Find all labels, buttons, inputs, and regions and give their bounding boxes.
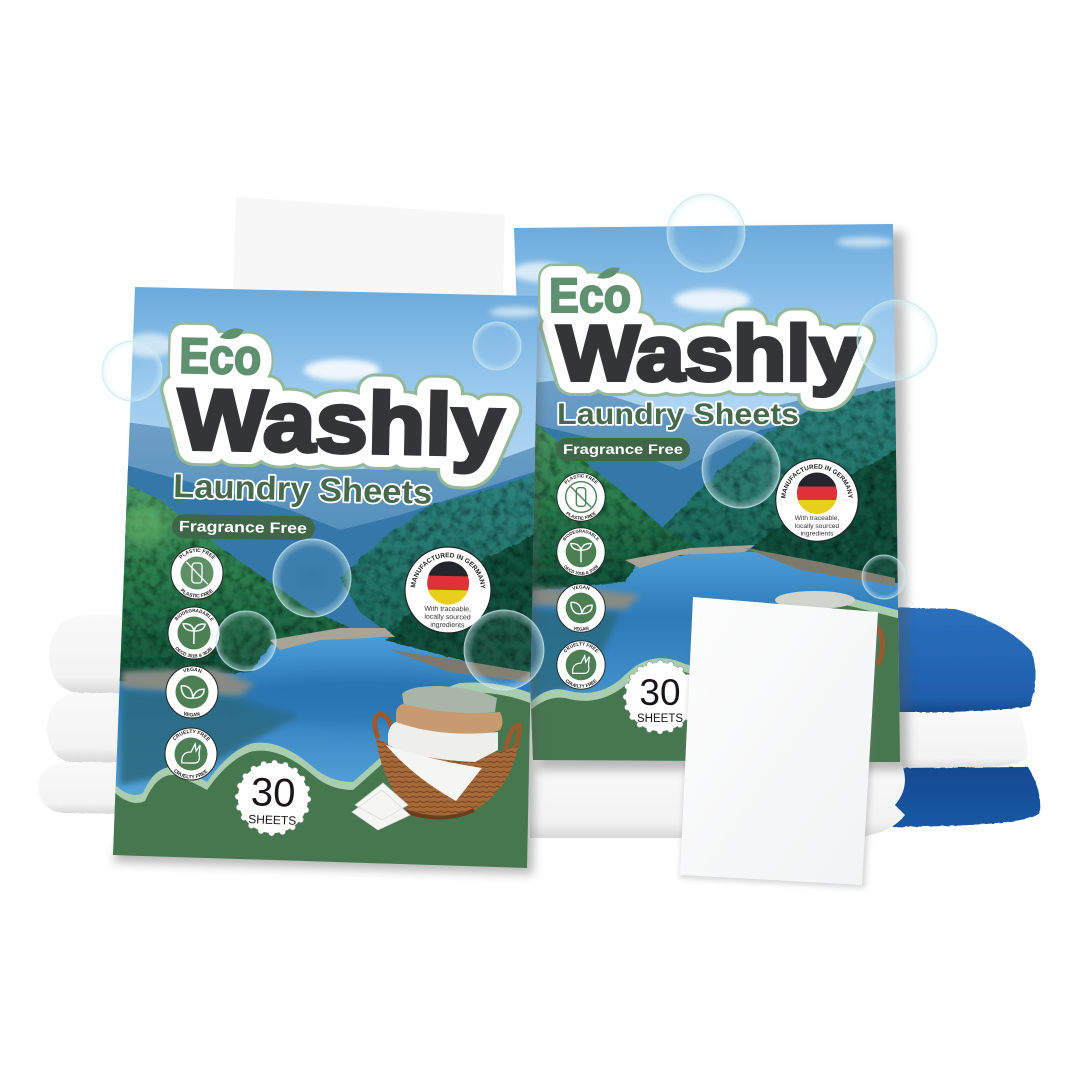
left pack badge: manufactured in Germany: locally sourced bbox=[424, 614, 471, 621]
left pack badge: manufactured in Germany: MANUFACTURED IN GERMANY bbox=[410, 552, 486, 588]
left pack badge: manufactured in Germany: ingredients bbox=[430, 622, 465, 629]
soap bubbles bbox=[102, 194, 937, 690]
left pack 30 sheets seal: SHEETS bbox=[248, 812, 296, 828]
right pack badge: plastic free: PLASTIC FREE bbox=[564, 474, 598, 484]
right towel stack bbox=[885, 607, 1040, 827]
back laundry sheet bbox=[233, 197, 505, 300]
right pack badge: vegan: VEGAN bbox=[574, 626, 589, 631]
left pack logo: Washly bbox=[177, 372, 505, 474]
left pack badge: vegan: VEGAN bbox=[184, 712, 200, 716]
right pack badge: biodegradable: OECD 301B & 302B bbox=[564, 565, 598, 575]
left pack logo: Washly bbox=[177, 372, 505, 474]
left pack badge: vegan bbox=[166, 666, 218, 718]
white towel under right pack bbox=[530, 760, 905, 838]
left pack badge: manufactured in Germany: With traceable, bbox=[424, 606, 471, 613]
front sheet shadow bbox=[680, 600, 880, 888]
right pack 30 sheets seal: SHEETS bbox=[637, 713, 683, 725]
right pack badge: biodegradable bbox=[556, 527, 606, 577]
right pack towels peeking bbox=[775, 591, 855, 609]
right pack badge: plastic free: PLASTIC FREE bbox=[566, 512, 596, 520]
left pack artwork bbox=[110, 285, 545, 870]
right pack badge: manufactured in Germany: locally sourced bbox=[795, 523, 839, 530]
left pack fragrance pill: Fragrance Free bbox=[179, 518, 307, 537]
left pack badge: plastic free bbox=[170, 546, 224, 600]
left pack logo: Eco bbox=[179, 328, 262, 385]
right pack artwork bbox=[505, 220, 910, 772]
right pack badge: cruelty free: CRUELTY FREE bbox=[564, 642, 598, 653]
product pack: right bbox=[514, 224, 900, 762]
left pack basket with towels bbox=[352, 686, 519, 830]
right pack 30 sheets seal: 30 bbox=[639, 672, 681, 713]
product pack: left bbox=[113, 287, 538, 868]
right pack logo: Eco bbox=[549, 270, 631, 323]
left pack logo bbox=[177, 327, 506, 474]
right pack badge: vegan: VEGAN bbox=[572, 585, 590, 590]
right pack badge: manufactured in Germany: With traceable, bbox=[795, 515, 840, 522]
left pack product name: Laundry Sheets bbox=[173, 467, 433, 511]
right pack logo: Washly bbox=[557, 309, 859, 397]
left pack badge: biodegradable bbox=[168, 606, 220, 660]
left pack badge: cruelty free: CRUELTY FREE bbox=[174, 769, 208, 778]
right pack product name: Laundry Sheets bbox=[557, 398, 799, 431]
left pack badge: cruelty free bbox=[164, 728, 218, 780]
right pack badge: manufactured in Germany: ingredients bbox=[801, 531, 834, 538]
right pack 30 sheets seal bbox=[626, 663, 694, 731]
right pack fragrance pill bbox=[556, 438, 690, 461]
right pack badge: manufactured in Germany: MANUFACTURED IN GERMANY bbox=[781, 464, 853, 498]
right pack badge: vegan bbox=[556, 583, 606, 633]
left pack badge: plastic free: PLASTIC FREE bbox=[179, 548, 216, 560]
left pack 30 sheets seal: 30 bbox=[250, 770, 296, 816]
left pack badge: biodegradable: BIODEGRADABLE bbox=[174, 608, 214, 622]
right pack logo: Eco bbox=[549, 270, 631, 323]
right pack shadow bbox=[535, 232, 908, 770]
right pack badge: plastic free bbox=[556, 472, 606, 522]
right pack logo: Washly bbox=[557, 309, 859, 397]
left pack badge: biodegradable: OECD 301B & 302B bbox=[176, 647, 212, 658]
right pack badge: cruelty free bbox=[556, 640, 606, 690]
left pack fragrance pill bbox=[172, 514, 315, 540]
right pack fragrance pill: Fragrance Free bbox=[563, 441, 683, 457]
right pack badge: biodegradable: BIODEGRADABLE bbox=[562, 530, 600, 541]
left pack shadow bbox=[113, 320, 541, 874]
left pack logo: Washly bbox=[177, 372, 505, 474]
right pack badge: manufactured in Germany bbox=[775, 458, 859, 542]
left pack logo: Eco bbox=[179, 328, 262, 385]
left pack 30 sheets seal bbox=[237, 762, 309, 834]
right pack badge: cruelty free: CRUELTY FREE bbox=[566, 679, 597, 688]
right pack logo: Washly bbox=[557, 309, 859, 397]
right pack logo bbox=[549, 267, 859, 397]
front laundry sheet bbox=[680, 597, 878, 885]
left pack loose sheets bbox=[352, 783, 410, 830]
left towel stack bbox=[38, 615, 140, 814]
right pack basket handle bbox=[876, 625, 883, 665]
left pack logo: Eco bbox=[179, 328, 262, 385]
left pack badge: plastic free: PLASTIC FREE bbox=[180, 588, 213, 598]
left pack badge: cruelty free: CRUELTY FREE bbox=[172, 730, 210, 742]
right pack logo: Eco bbox=[549, 270, 631, 323]
left pack badge: vegan: VEGAN bbox=[182, 668, 202, 673]
left pack badge: manufactured in Germany bbox=[404, 546, 492, 634]
